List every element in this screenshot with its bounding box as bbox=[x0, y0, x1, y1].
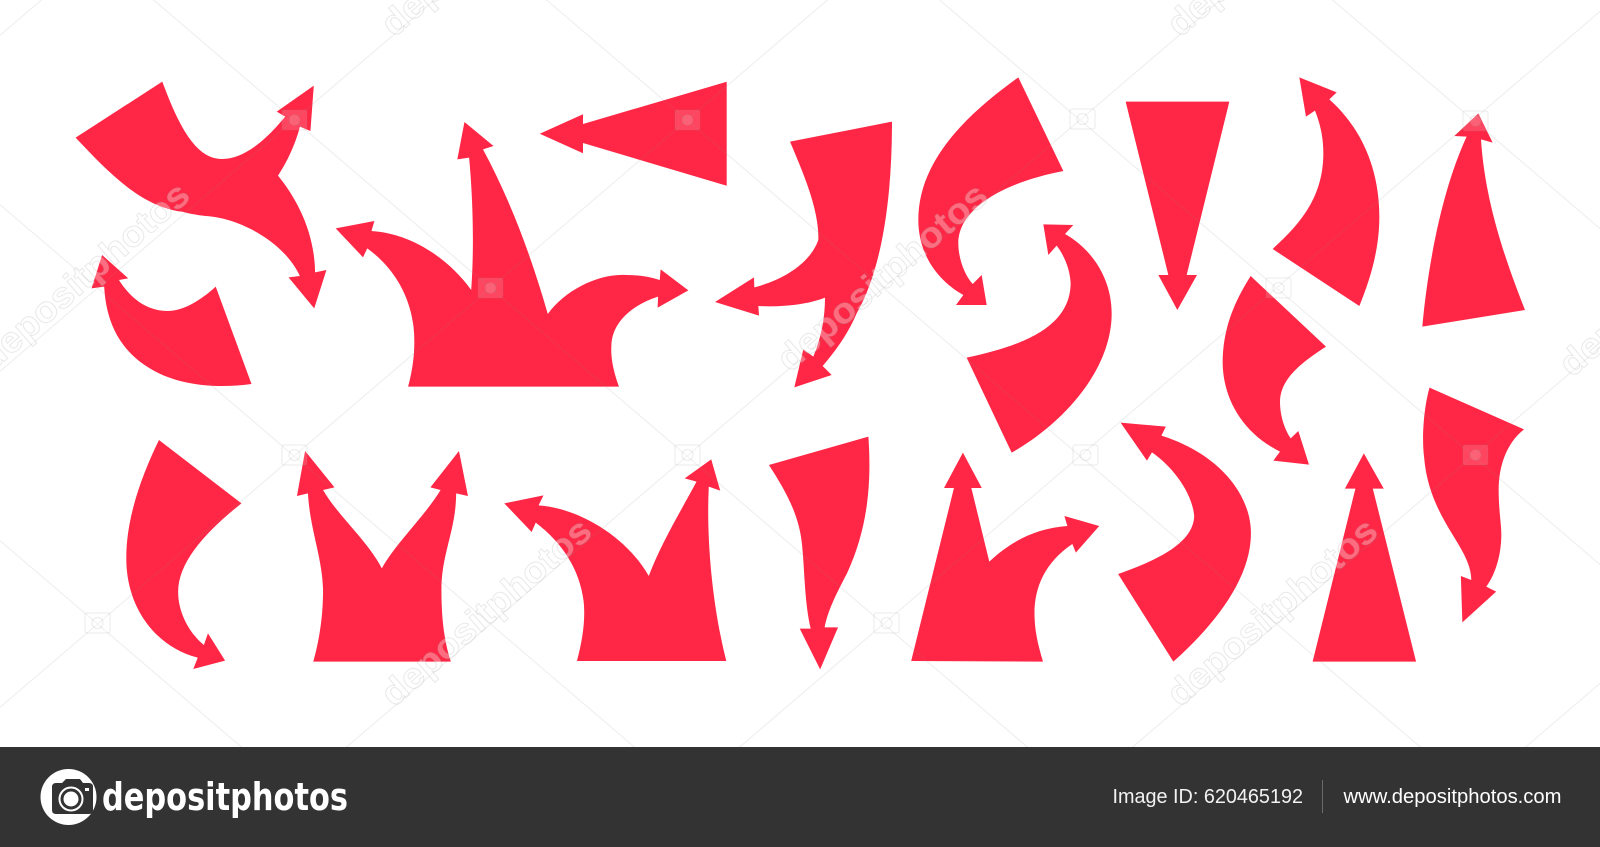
arrow set: top left group bbox=[76, 82, 688, 387]
arrow: curved down-right bbox=[126, 440, 241, 669]
arrows: bottom right group bbox=[769, 388, 1524, 669]
watermark camera icons bbox=[85, 109, 1488, 633]
website url: www.depositphotos.com bbox=[1342, 786, 1562, 808]
arrow: jester three-head bbox=[336, 122, 688, 387]
footer bar bbox=[0, 747, 1600, 847]
arrow: curved down-right bbox=[1223, 276, 1326, 465]
arrow: straight triangle up bbox=[1313, 453, 1416, 662]
watermark text: depositphotos bbox=[1158, 509, 1385, 714]
arrow: curved up-left bbox=[1273, 77, 1379, 306]
arrow: short curved up-left bbox=[92, 255, 252, 386]
arrow: two-headed curved fork bbox=[504, 459, 726, 661]
arrow: curved up bbox=[967, 224, 1112, 453]
arrow: straight triangle down bbox=[1126, 102, 1229, 310]
arrow: three-way split bbox=[76, 82, 326, 308]
watermark text: depositphotos bbox=[768, 174, 995, 379]
arrow: tapered up bbox=[1422, 113, 1525, 327]
arrow: up and right fork bbox=[911, 453, 1099, 662]
image id: Image ID: 620465192 bbox=[1112, 786, 1303, 808]
icon: camera logo bbox=[40, 769, 96, 825]
arrows: top middle group bbox=[715, 77, 1112, 453]
arrow: curved up-left bbox=[1118, 423, 1251, 662]
arrow: straight triangle left bbox=[540, 82, 727, 186]
arrows: bottom left group bbox=[126, 440, 726, 669]
arrow: curved down bbox=[918, 77, 1063, 305]
logo wordmark: depositphotos bbox=[102, 775, 348, 819]
watermark text: depositphotos bbox=[372, 509, 599, 714]
arrow: two-headed fork bbox=[297, 451, 468, 662]
arrows: top right group bbox=[1126, 77, 1525, 465]
arrow: wavy down right bbox=[1423, 388, 1524, 622]
arrow: split down and left bbox=[715, 122, 892, 387]
arrow: wavy down bbox=[769, 437, 869, 669]
